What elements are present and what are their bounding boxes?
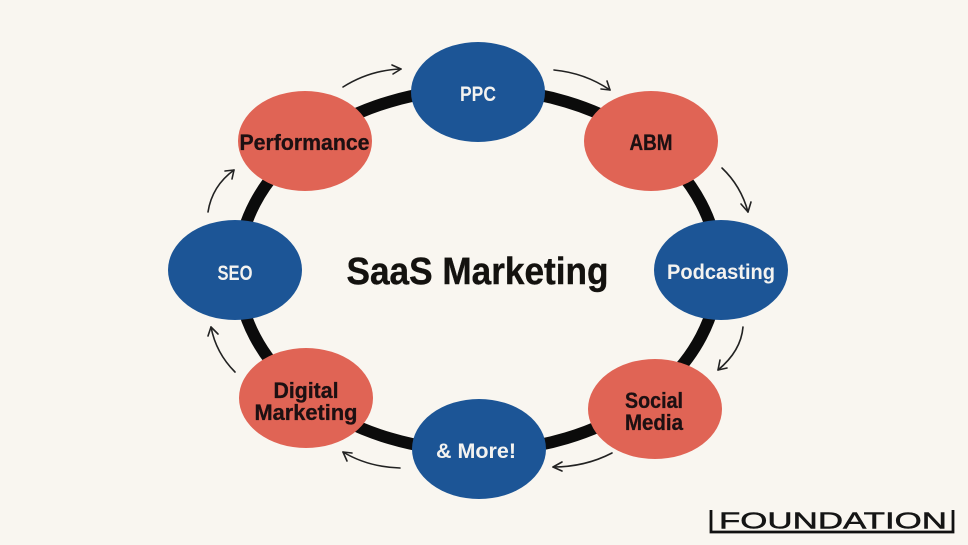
node: ABM: ABM [630,130,672,155]
arrow: PPC to ABM [554,70,610,90]
node: Performance: Performance [240,130,370,155]
node: SEO [168,220,302,320]
node: Digital Marketing [239,348,373,448]
node: Digital Marketing: Marketing [254,400,358,425]
arrow: & More! to Digital Marketing [343,452,400,468]
node: Digital Marketing: Digital [274,378,338,403]
arrow: SEO to Performance [208,170,234,212]
arrow: Performance to PPC [343,65,401,87]
title: SaaS Marketing: SaaS Marketing [346,251,608,293]
logo: FOUNDATION [711,508,953,534]
node: & More!: & More! [436,440,516,463]
logo: FOUNDATION: FOUNDATION [719,508,947,534]
arrow: ABM to Podcasting [722,168,751,212]
arrow: Digital Marketing to SEO [208,327,235,372]
ring connecting the nodes [238,89,718,451]
node: Social Media: Media [625,410,684,435]
node: Performance [238,91,372,191]
node: ABM [584,91,718,191]
node: & More! [412,399,546,499]
node: Social Media: Social [625,388,683,413]
node: Podcasting [654,220,788,320]
arrow: Social Media to & More! [553,453,612,471]
node: PPC: PPC [460,83,496,106]
arrow: Podcasting to Social Media [718,327,743,370]
node: SEO: SEO [218,262,252,285]
node: Podcasting: Podcasting [667,261,775,284]
node: PPC [411,42,545,142]
node: Social Media [588,359,722,459]
